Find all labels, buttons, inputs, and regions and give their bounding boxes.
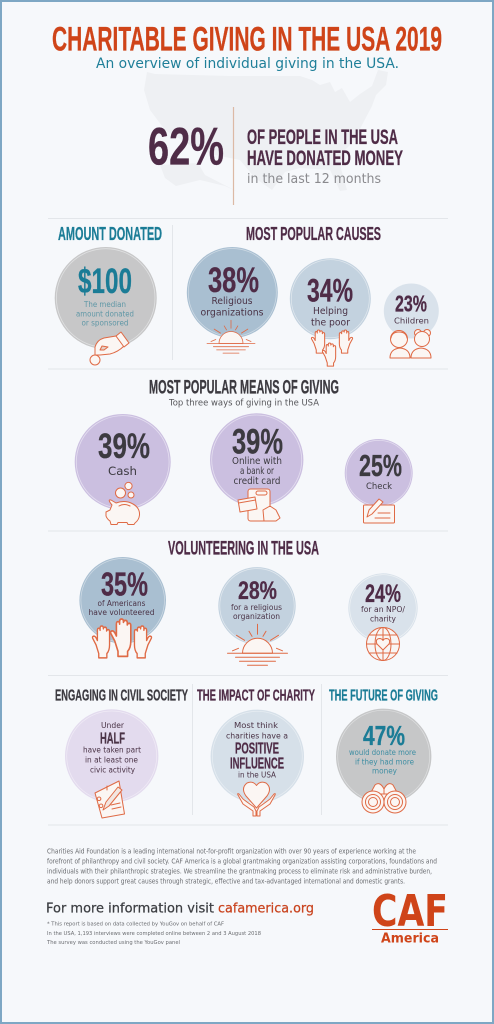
heading: most popular causes: MOST POPULAR CAUSES: [246, 223, 381, 244]
icon: check and pen: [364, 499, 394, 523]
icon: sunrise: [207, 320, 255, 353]
icon: children: [390, 330, 431, 358]
circle: 39% cash: Cash: [108, 464, 137, 478]
circle: 39% cash: [75, 414, 171, 510]
panel: most popular means of giving: [75, 378, 413, 524]
circle: 35% volunteered: of Americans: [98, 599, 146, 608]
circle: 23% children: [384, 284, 439, 338]
heading: engaging in civil society: ENGAGING IN CIVIL SOCIETY: [55, 688, 188, 705]
headline statistic: 62%: in the last 12 months: [247, 172, 381, 187]
circle: 24% NPO or charity: charity: [370, 615, 396, 624]
circle: positive influence: charities have a: [226, 730, 288, 740]
circle: 28% religious organization: 28%: [238, 577, 277, 605]
circle: 47% would donate more: money: [372, 766, 397, 776]
panel: most popular causes: [187, 223, 439, 366]
circle: 28% religious organization: organization: [233, 612, 280, 621]
icon: binoculars: [362, 784, 406, 813]
circle: 28% religious organization: [218, 567, 296, 644]
circle: 38% religious organizations: 38%: [208, 261, 259, 300]
text block: survey notes: In the USA, 1,193 interviews were completed online between 2 and 3 August 2018: [47, 931, 261, 937]
icon: raised hands: [311, 330, 353, 366]
headline statistic: 62%: 62%: [148, 118, 224, 176]
icon: volunteers' raised hands: [93, 619, 151, 658]
circle: $100: amount donated: [76, 310, 134, 318]
icon: piggy bank with coins: [106, 482, 140, 524]
circle: $100: $100: [78, 262, 132, 301]
text block: survey notes: [46, 922, 261, 946]
panel: amount donated: [55, 223, 162, 365]
circle: 47% would donate more: 47%: [363, 720, 405, 751]
circle: 47% would donate more: if they had more: [355, 756, 414, 766]
subtitle: An overview of individual giving in the USA.: [96, 56, 399, 72]
circle: 34% helping the poor: Helping: [313, 306, 348, 317]
call to action: website: cafamerica.org: [218, 900, 314, 916]
headline statistic: 62%: HAVE DONATED MONEY: [247, 147, 403, 170]
text block: about CAF: [47, 846, 437, 885]
circle: 39% online: [210, 413, 303, 507]
icon: phone, bank card and hand: [238, 489, 280, 521]
circle: 35% volunteered: [79, 557, 166, 644]
circle: 39% online: a bank or: [240, 466, 274, 477]
circle: under half: have taken part: [83, 745, 142, 755]
circle: positive influence: [211, 710, 304, 803]
circle: 47% would donate more: [336, 709, 431, 804]
circle: 35% volunteered: have volunteered: [88, 608, 155, 617]
circle: 34% helping the poor: [290, 258, 371, 339]
call to action: website: [46, 900, 314, 916]
subheading: Top three ways of giving in the USA: [168, 399, 320, 409]
background map of the USA: [144, 70, 388, 193]
circle: 24% NPO or charity: 24%: [365, 580, 401, 608]
heading: most popular means of giving: MOST POPULAR MEANS OF GIVING: [149, 378, 339, 398]
heading: the impact of charity: THE IMPACT OF CHARITY: [197, 688, 315, 705]
circle: 23% children: Children: [394, 316, 429, 325]
icon: hand with coin: [90, 332, 129, 365]
circle: 39% online: credit card: [234, 476, 281, 487]
panel: the impact of charity: [197, 688, 315, 816]
circle: under half: HALF: [100, 730, 125, 747]
circle: $100: The median: [83, 300, 126, 309]
circle: 39% online: Online with: [232, 456, 282, 467]
panel: engaging in civil society: [55, 688, 188, 818]
circle: positive influence: INFLUENCE: [230, 755, 284, 772]
circle: $100: or sponsored: [82, 318, 129, 328]
circle: 39% online: 39%: [232, 422, 283, 461]
circle: 39% cash: 39%: [98, 426, 150, 466]
logo: CAF America: America: [381, 931, 439, 947]
circle: under half: in at least one: [85, 755, 138, 765]
logo: CAF America: CAF: [372, 886, 448, 937]
icon: sunrise: [228, 624, 288, 665]
circle: 35% volunteered: 35%: [101, 566, 148, 603]
circle: 24% NPO or charity: [348, 573, 418, 643]
headline statistic: 62%: [148, 107, 403, 205]
text block: survey notes: * This report is based on data collected by YouGov on behalf of CAF: [47, 922, 224, 928]
icon: globe with heart: [366, 628, 400, 660]
text block: about CAF: and help donors support great causes through strategic, effective and tax-advantaged international and domestic grants.: [47, 876, 405, 885]
panel: the future of giving: [329, 688, 438, 813]
circle: 38% religious organizations: [187, 247, 278, 338]
headline statistic: 62%: OF PEOPLE IN THE USA: [247, 126, 398, 149]
circle: under half: civic activity: [90, 765, 135, 775]
heading: amount donated: AMOUNT DONATED: [58, 223, 162, 244]
heading: volunteering in the USA: VOLUNTEERING IN THE USA: [168, 538, 319, 559]
circle: 38% religious organizations: Religious: [212, 296, 253, 307]
call to action: website: For more information visit: [46, 900, 214, 916]
circle: positive influence: Most think: [234, 720, 278, 730]
circle: 24% NPO or charity: for an NPO/: [361, 605, 405, 614]
circle: positive influence: POSITIVE: [235, 740, 279, 757]
logo: CAF America: [372, 886, 448, 947]
circle: 23% children: 23%: [395, 291, 427, 317]
circle: 28% religious organization: for a religious: [231, 603, 282, 612]
circle: 34% helping the poor: 34%: [307, 272, 353, 308]
icon: hands holding a heart: [238, 782, 275, 816]
circle: 38% religious organizations: organizations: [200, 308, 264, 318]
circle: 25% check: [345, 439, 413, 507]
circle: 34% helping the poor: the poor: [311, 318, 350, 329]
circle: under half: [65, 709, 158, 803]
circle: 25% check: Check: [366, 482, 393, 492]
circle: 47% would donate more: would donate more: [349, 747, 416, 757]
circle: positive influence: in the USA: [238, 770, 276, 780]
circle: under half: Under: [101, 720, 125, 730]
icon: form and pencil: [95, 781, 124, 818]
text block: survey notes: The survey was conducted using the YouGov panel: [46, 940, 180, 946]
circle: $100: [55, 247, 157, 349]
panel: volunteering in the USA: [79, 538, 418, 665]
circle: 25% check: 25%: [359, 448, 402, 483]
